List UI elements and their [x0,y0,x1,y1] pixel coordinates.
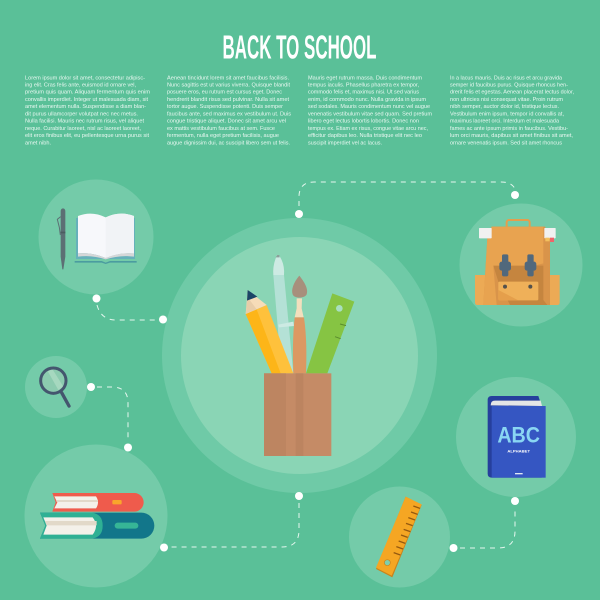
text block: column 2 [167,75,291,146]
text block: column 3 [308,75,432,146]
text block: column 4: drerit felis et egestas. Aenean placerat lectus dolor, [450,90,574,96]
text block: column 4: semper id faucibus purus. Quisque rhoncus hen- [450,82,568,88]
pale pen [273,255,294,373]
icon: magnifier [41,368,69,406]
text block: column 1 [25,75,150,146]
green ruler [306,293,354,373]
text block: column 2: fermentum, nulla eget pretium facilisis, augue [167,133,279,139]
text block: column 4: fames ac ante ipsum primis in faucibus. Vestibu- [450,126,568,132]
icon: stacked books [40,493,154,539]
text block: column 3: suscipit imperdiet vel ac lacus. [308,140,382,146]
text block: column 2: hendrerit blandit risus sed pulvinar. Nulla sit amet [167,97,289,103]
book title: ABC [497,423,540,448]
text block: column 1: pretium quis quam. Aliquam fermentum quis enim [25,90,150,96]
book subtitle: ALPHABET [507,450,530,454]
text block: column 1: elit eros finibus elit, eu pellentesque urna purus sit [25,133,149,139]
panel: alphabet book [456,377,576,497]
text block: column 1: amet elementum nulla. Suspendisse a diam blan- [25,104,146,110]
icon: pencil cup contents [246,255,354,456]
text block: column 2: Nunc sagittis est ut varius viverra. Quisque blandit [167,82,290,88]
text block: column 2: tortor augue. Suspendisse potenti. Duis semper [167,104,283,110]
text block: column 1: Lorem ipsum dolor sit amet, consectetur adipisc- [25,75,145,81]
text block: column 3: venenatis vestibulum vitae sed quam. Sed pretium [308,111,432,117]
connector dots [87,191,519,552]
text block: column 3: commodo felis et, maximus nisi. Ut sed varius [308,90,419,96]
cup [264,373,331,456]
dashed connectors [97,182,515,548]
text block: column 3: Mauris eget rutrum massa. Duis condimentum [308,75,422,81]
text block: column 4: nibh semper, auctor dolor id, tristique lectus. [450,104,559,110]
panel: pen and open book [38,180,154,294]
title: BACK TO SCHOOL [222,28,376,66]
text block: column 4: ornare venenatis ipsum. Sed sit amet rhoncus [450,140,562,146]
text block: column 3: tempus ex. Etiam ex risus, congue vitae arcu nec, [308,126,428,132]
text block: column 4: lum orci mauris, dapibus sit amet finibus sit amet, [450,133,573,139]
text block: column 1: convallis imperdiet. Integer ut malesuada diam, sit [25,97,148,103]
icon: ABC book [488,396,546,478]
text block: column 2: congue tristique aliquet. Donec sit amet arcu vel [167,119,286,125]
text block: column 2: ex mattis vestibulum faucibus at sem. Fusce [167,126,275,132]
text block: column 4: In a lacus mauris. Duis ac risus et arcu gravida [450,75,563,81]
text block: column 4 [450,75,574,146]
text block: column 2: posuere eros, eu rutrum est cursus eget. Donec [167,90,282,96]
icon: open book [75,214,137,264]
text block: column 4: maximus laoreet orci. Interdum et malesuada [450,119,560,125]
text block: column 1: amet nibh. [25,140,51,146]
front pocket [498,282,538,300]
text block: column 4: non ultricies nisi consequat vitae. Proin rutrum [450,97,563,103]
teal book [40,513,154,539]
text block: column 1: Nulla facilisi. Mauris nec rutrum risus, vel aliquet [25,119,144,125]
text block: column 2: Aenean tincidunt lorem sit amet faucibus facilisis. [167,75,289,81]
panel: central pencil cup [162,218,437,493]
icon: backpack [475,220,560,305]
text block: column 3: tempus iaculis. Phasellus pharetra ex tempor, [308,82,419,88]
yellow pencil [246,290,293,373]
text block: column 3: enim, id commodo nunc. Nulla gravida in ipsum [308,97,426,103]
text block: column 1: dit purus ullamcorper volutpat nec nec metus. [25,111,138,117]
icon: pen [57,208,65,269]
text block: column 2: faucibus ante, sed maximus ex vestibulum ut. Duis [167,111,291,117]
text block: column 3: sed sodales. Mauris condimentum nunc vel augue [308,104,430,110]
buckles [499,254,536,276]
red book [52,493,144,512]
panel: magnifying glass [25,356,87,418]
panel: backpack [460,204,582,326]
text block: column 4: Vestibulum enim ipsum, tempor id convallis at, [450,111,564,117]
icon: orange ruler [376,497,422,577]
text block: column 3: efficitur dapibus leo. Nulla tristique elit nec leo [308,133,422,139]
panel: ruler [349,486,450,588]
text block: column 2: augue dignissim dui, ac suscipit libero sem ut felis. [167,140,290,146]
panel: stacked books [24,444,168,588]
brush [292,276,307,373]
text block: column 1: ing elit. Cras felis ante, euismod id ornare vel, [25,82,136,88]
text block: column 1: neque. Curabitur laoreet, nisl ac laoreet laoreet, [25,126,141,132]
text block: column 3: libero eget lectus lobortis lobortis. Donec non [308,119,419,125]
